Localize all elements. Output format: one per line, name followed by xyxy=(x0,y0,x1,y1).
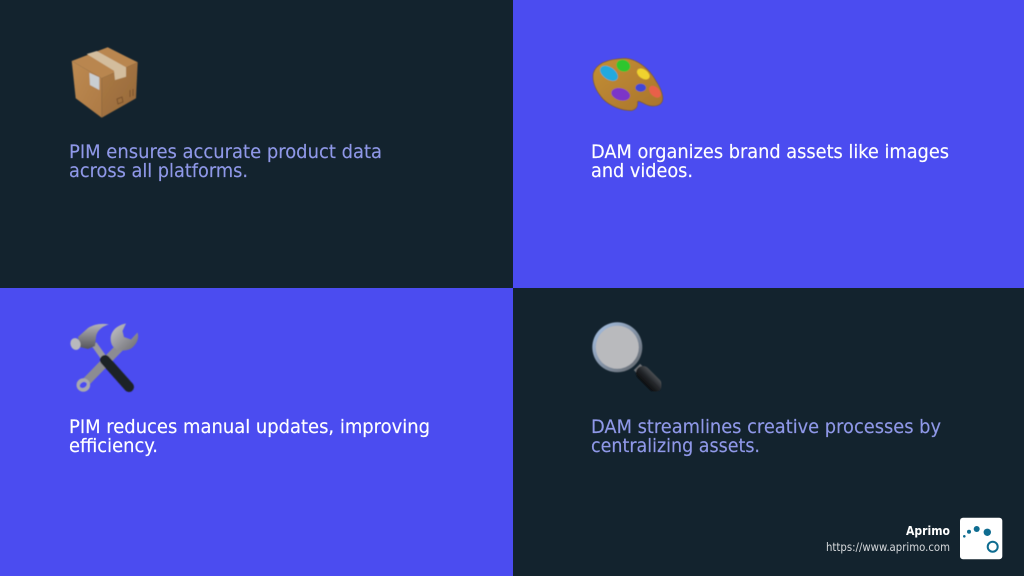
text: DAM streamlining: DAM streamlines creative processes by xyxy=(591,417,941,438)
text: DAM organization: and videos. xyxy=(591,161,693,182)
icon: Aprimo logo xyxy=(960,518,1002,559)
icon: cardboard box xyxy=(72,47,138,118)
text: PIM efficiency: efficiency. xyxy=(69,436,158,457)
panel: DAM streamlining xyxy=(513,288,1024,576)
text: PIM efficiency xyxy=(69,417,430,457)
text: PIM accuracy xyxy=(69,142,382,182)
text: PIM accuracy: PIM ensures accurate product data xyxy=(69,142,382,163)
text: DAM organization xyxy=(591,142,949,182)
icon: hammer and wrench xyxy=(69,324,138,392)
text: DAM streamlining xyxy=(591,417,941,457)
brand name: Aprimo xyxy=(906,524,950,538)
text: DAM organization: DAM organizes brand assets like images xyxy=(591,142,949,163)
text: PIM accuracy: across all platforms. xyxy=(69,161,248,182)
panel: PIM accuracy xyxy=(0,0,513,288)
icon: artist palette xyxy=(593,58,663,111)
panel: DAM organization xyxy=(513,0,1024,288)
text: PIM efficiency: PIM reduces manual updates, improving xyxy=(69,417,430,438)
brand block xyxy=(826,518,1002,559)
text: DAM streamlining: centralizing assets. xyxy=(591,436,760,457)
icon: magnifying glass xyxy=(592,322,655,385)
brand URL: https://www.aprimo.com xyxy=(826,540,950,554)
panel: PIM efficiency xyxy=(0,288,513,576)
